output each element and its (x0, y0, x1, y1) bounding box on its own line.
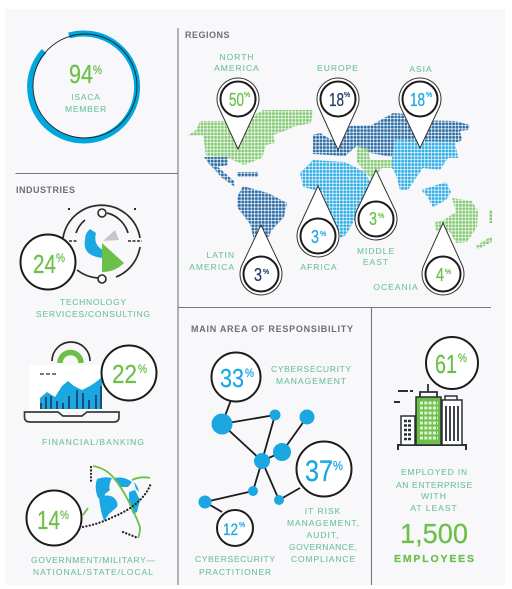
figure: 1,500 employees: 1,500 (400, 518, 468, 549)
ISACA member ring (30, 33, 137, 140)
label: enterprise size: WITH (421, 491, 447, 501)
icon: government globe (83, 466, 151, 538)
map: oceania (435, 198, 492, 249)
callout: 22 percent: % (138, 362, 147, 376)
map: north america (187, 110, 313, 165)
pin: north america: 50 (229, 90, 244, 110)
pin: asia (399, 78, 441, 148)
pin: oceania: 4 (436, 265, 444, 285)
heading: industries: INDUSTRIES (16, 185, 76, 195)
ISACA member ring: ISACA (71, 92, 101, 102)
label: enterprise size (396, 467, 472, 513)
pin: oceania: % (445, 269, 451, 276)
label: cybersecurity management: MANAGEMENT (276, 376, 346, 386)
callout: 22 percent (102, 346, 156, 400)
ISACA member ring: 94 (69, 59, 93, 89)
callout: 61 percent: 61 (435, 349, 457, 379)
pin: middle east: % (378, 213, 384, 220)
pin: latin america: % (263, 269, 269, 276)
ISACA member ring: % (93, 63, 102, 77)
label: technology: TECHNOLOGY (60, 297, 126, 307)
labels: regions: AMERICA (189, 262, 235, 272)
callout: 61 percent: % (458, 351, 467, 365)
map: europe and north asia (313, 113, 470, 157)
icon: office buildings (394, 384, 466, 450)
label: it risk: AUDIT, (307, 530, 339, 540)
pin: middle east: 3 (369, 209, 377, 229)
ISACA member ring: MEMBER (65, 104, 107, 114)
pin: north america: % (244, 92, 250, 99)
label: it risk: IT RISK (305, 506, 341, 516)
label: enterprise size: EMPLOYED IN (401, 467, 467, 477)
pin: latin america: 3 (254, 265, 262, 285)
pin: north america (217, 78, 259, 149)
callout: 24 percent: % (56, 251, 65, 265)
pin: latin america (240, 225, 282, 295)
callout: 14 percent: 14 (37, 505, 60, 535)
pin: europe: % (344, 92, 350, 99)
labels: regions: ASIA (409, 64, 433, 74)
label: it risk: COMPLIANCE (291, 554, 355, 564)
labels: regions: EAST (363, 257, 389, 267)
label: technology (36, 297, 150, 319)
label: it risk: GOVERNANCE, (289, 542, 357, 552)
pin: middle east (355, 170, 397, 240)
callout: 14 percent: % (60, 508, 69, 522)
callout: 24 percent: 24 (33, 249, 56, 279)
icon: financial laptop (24, 342, 119, 422)
label: technology: SERVICES/CONSULTING (36, 309, 150, 319)
map: central and south america (204, 157, 287, 240)
figure: 1,500 employees: EMPLOYEES (394, 553, 474, 565)
callout: 12 percent: 12 (223, 520, 238, 539)
figure: 1,500 employees (394, 518, 474, 565)
labels: regions: OCEANIA (373, 282, 419, 292)
label: government: GOVERNMENT/MILITARY— (31, 555, 156, 565)
callout: 12 percent: % (239, 522, 245, 529)
label: financial: FINANCIAL/BANKING (42, 437, 144, 447)
pin: oceania (422, 223, 464, 295)
label: it risk (287, 506, 359, 564)
callout: 33 percent: 33 (220, 363, 244, 393)
callout: 61 percent (426, 337, 478, 389)
pin: africa (297, 186, 339, 257)
callout: 37 percent (296, 442, 352, 496)
callout: 24 percent (20, 234, 76, 290)
callout: 37 percent: 37 (305, 455, 333, 488)
label: government (31, 555, 156, 577)
labels: regions: MIDDLE (357, 246, 395, 256)
callout: 12 percent (217, 510, 253, 546)
callout: 33 percent (212, 352, 260, 402)
icon: technology (63, 205, 142, 283)
label: cybersecurity management: CYBERSECURITY (271, 364, 351, 374)
pin: europe (317, 78, 359, 150)
label: cybersecurity management (271, 364, 351, 386)
label: cybersecurity practitioner: PRACTITIONER (199, 567, 271, 577)
labels: regions: EUROPE (317, 63, 359, 73)
network diagram (198, 400, 314, 512)
callout: 37 percent: % (333, 458, 343, 473)
label: cybersecurity practitioner: CYBERSECURITY (195, 554, 275, 564)
map: middle east (357, 147, 392, 180)
label: enterprise size: AN ENTERPRISE (396, 480, 472, 490)
labels: regions (189, 52, 433, 292)
heading: main area of responsibility: MAIN AREA OF RESPONSIBILITY (191, 324, 353, 334)
callout: 22 percent: 22 (112, 359, 137, 389)
labels: regions: LATIN (207, 250, 235, 260)
pin: africa: 3 (311, 227, 319, 247)
map: south and east asia (392, 140, 458, 207)
map: africa (300, 160, 372, 240)
label: cybersecurity practitioner (195, 554, 275, 577)
pin: asia: 18 (410, 90, 425, 110)
label: government: NATIONAL/STATE/LOCAL (33, 567, 153, 577)
pin: asia: % (426, 92, 432, 99)
label: it risk: MANAGEMENT, (287, 518, 359, 528)
pin: europe: 18 (329, 90, 344, 110)
label: enterprise size: AT LEAST (410, 503, 458, 513)
callout: 33 percent: % (245, 366, 254, 380)
labels: regions: AFRICA (300, 262, 338, 272)
callout: 14 percent (26, 490, 82, 546)
world map (187, 110, 492, 249)
labels: regions: AMERICA (214, 63, 260, 73)
heading: regions: REGIONS (185, 30, 230, 40)
pin: africa: % (320, 231, 326, 238)
labels: regions: NORTH (219, 52, 255, 62)
